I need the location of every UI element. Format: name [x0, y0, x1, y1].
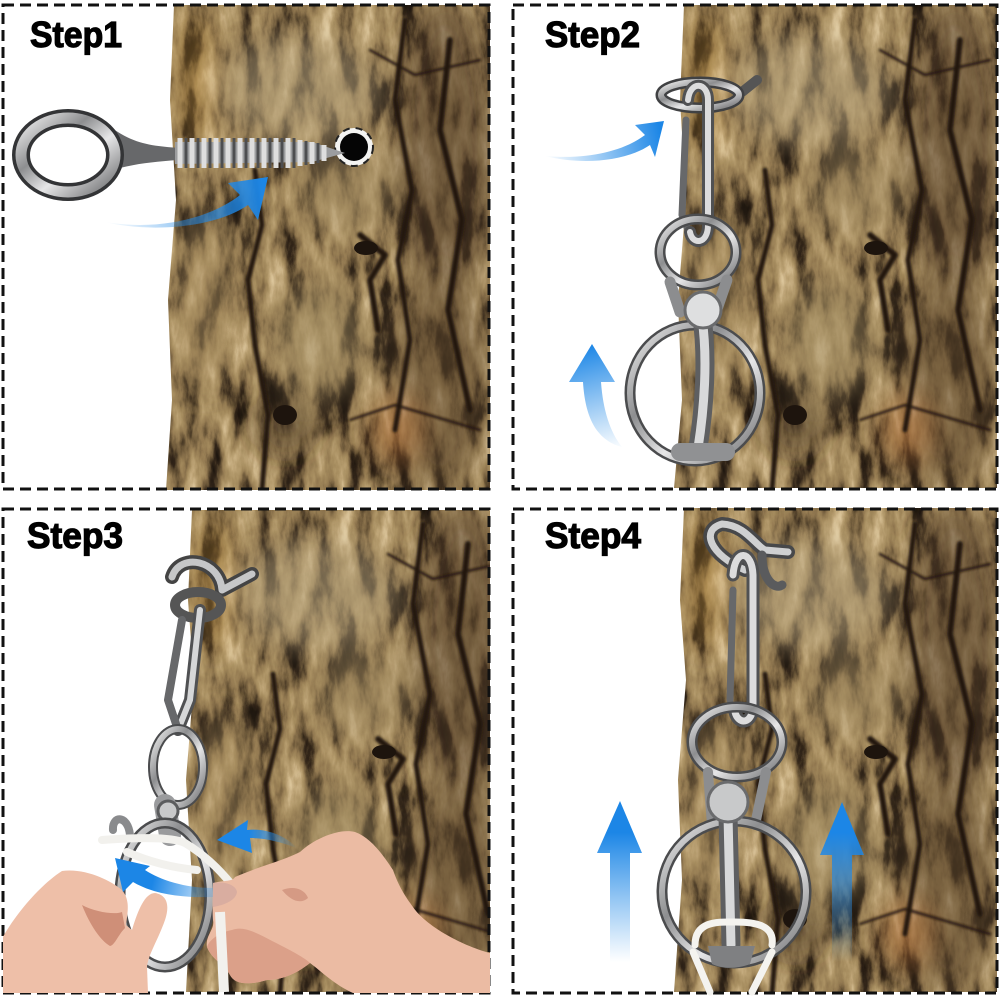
tree bark step 4 — [670, 504, 1000, 998]
tree bark step 2 — [670, 0, 1000, 500]
arrow step 3 upper — [217, 820, 297, 853]
left hand — [3, 871, 167, 993]
hardware step 4 — [662, 524, 806, 963]
panel: step 4 — [513, 504, 1000, 998]
dashed frame step 2 — [513, 5, 997, 489]
arrow step 4 right — [820, 802, 864, 962]
rope step 3 — [102, 838, 232, 885]
hanging rope step 3 — [220, 912, 224, 992]
icon: drilled hole — [335, 128, 373, 166]
dashed frame step 3 — [3, 509, 489, 993]
panel: step 1 — [3, 0, 500, 500]
shackle base step 4 — [708, 946, 755, 968]
tree bark step 3 — [186, 510, 490, 992]
heading step 2: Step2 — [545, 14, 640, 55]
arrow step 4 left — [597, 801, 642, 962]
icon: eye screw — [21, 118, 345, 192]
panel: step 2 — [513, 0, 1000, 500]
tree bark step 1 — [160, 0, 500, 500]
heading step 1: Step1 — [30, 14, 122, 55]
heading step 3: Step3 — [27, 515, 123, 556]
dashed frame step 1 — [3, 5, 489, 489]
arrow step 2 bottom — [569, 344, 622, 447]
arrow step 2 top — [545, 121, 664, 161]
rope step 4 — [693, 922, 772, 992]
hardware step 2 — [630, 80, 760, 461]
arrow step 3 lower — [115, 858, 213, 897]
hardware step 3 — [113, 562, 252, 967]
heading step 4: Step4 — [545, 515, 641, 556]
panel: step 3 — [3, 504, 518, 998]
right hand — [207, 831, 490, 993]
arrow step 1 — [105, 177, 268, 228]
dashed frame step 4 — [513, 509, 997, 993]
